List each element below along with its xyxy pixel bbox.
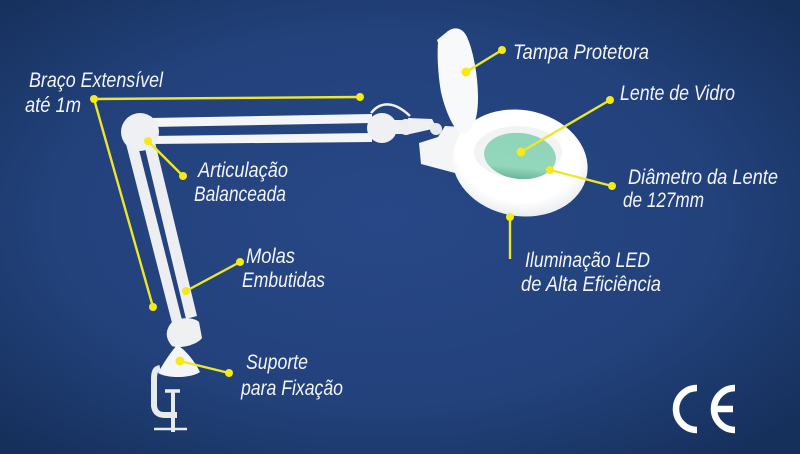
label: Tampa Protetora: Tampa Protetora [513,41,649,64]
label: Lente de Vidro: Lente de Vidro [620,82,735,105]
label: Balanceada: Balanceada [194,183,286,206]
pivot joint [167,318,202,347]
magnifier ring [444,99,596,227]
CE mark [676,388,735,430]
green lens [482,129,558,183]
callout dots [90,46,616,377]
label: Articulação: Articulação [196,159,288,182]
balanced joint [121,113,159,151]
label: Embutidas: Embutidas [242,269,325,292]
upper arm [150,114,372,144]
label: Diâmetro da Lente: Diâmetro da Lente [628,166,778,189]
elbow joint [367,104,442,143]
lower arm [125,138,197,323]
callout lines [94,50,612,373]
label: Braço Extensível: Braço Extensível [29,69,164,92]
label: até 1m: até 1m [25,94,81,117]
label: Suporte: Suporte [246,351,308,374]
clamp base cone [158,345,200,377]
label: Iluminação LED: Iluminação LED [525,249,650,272]
label: Molas: Molas [246,245,295,268]
clamp [154,368,187,432]
label: para Fixação: para Fixação [240,377,343,400]
lamp base block [419,126,480,173]
protective lid [437,28,478,134]
label: de Alta Eficiência: de Alta Eficiência [521,273,661,296]
lamp illustration [121,28,596,432]
label: de 127mm: de 127mm [623,189,704,212]
